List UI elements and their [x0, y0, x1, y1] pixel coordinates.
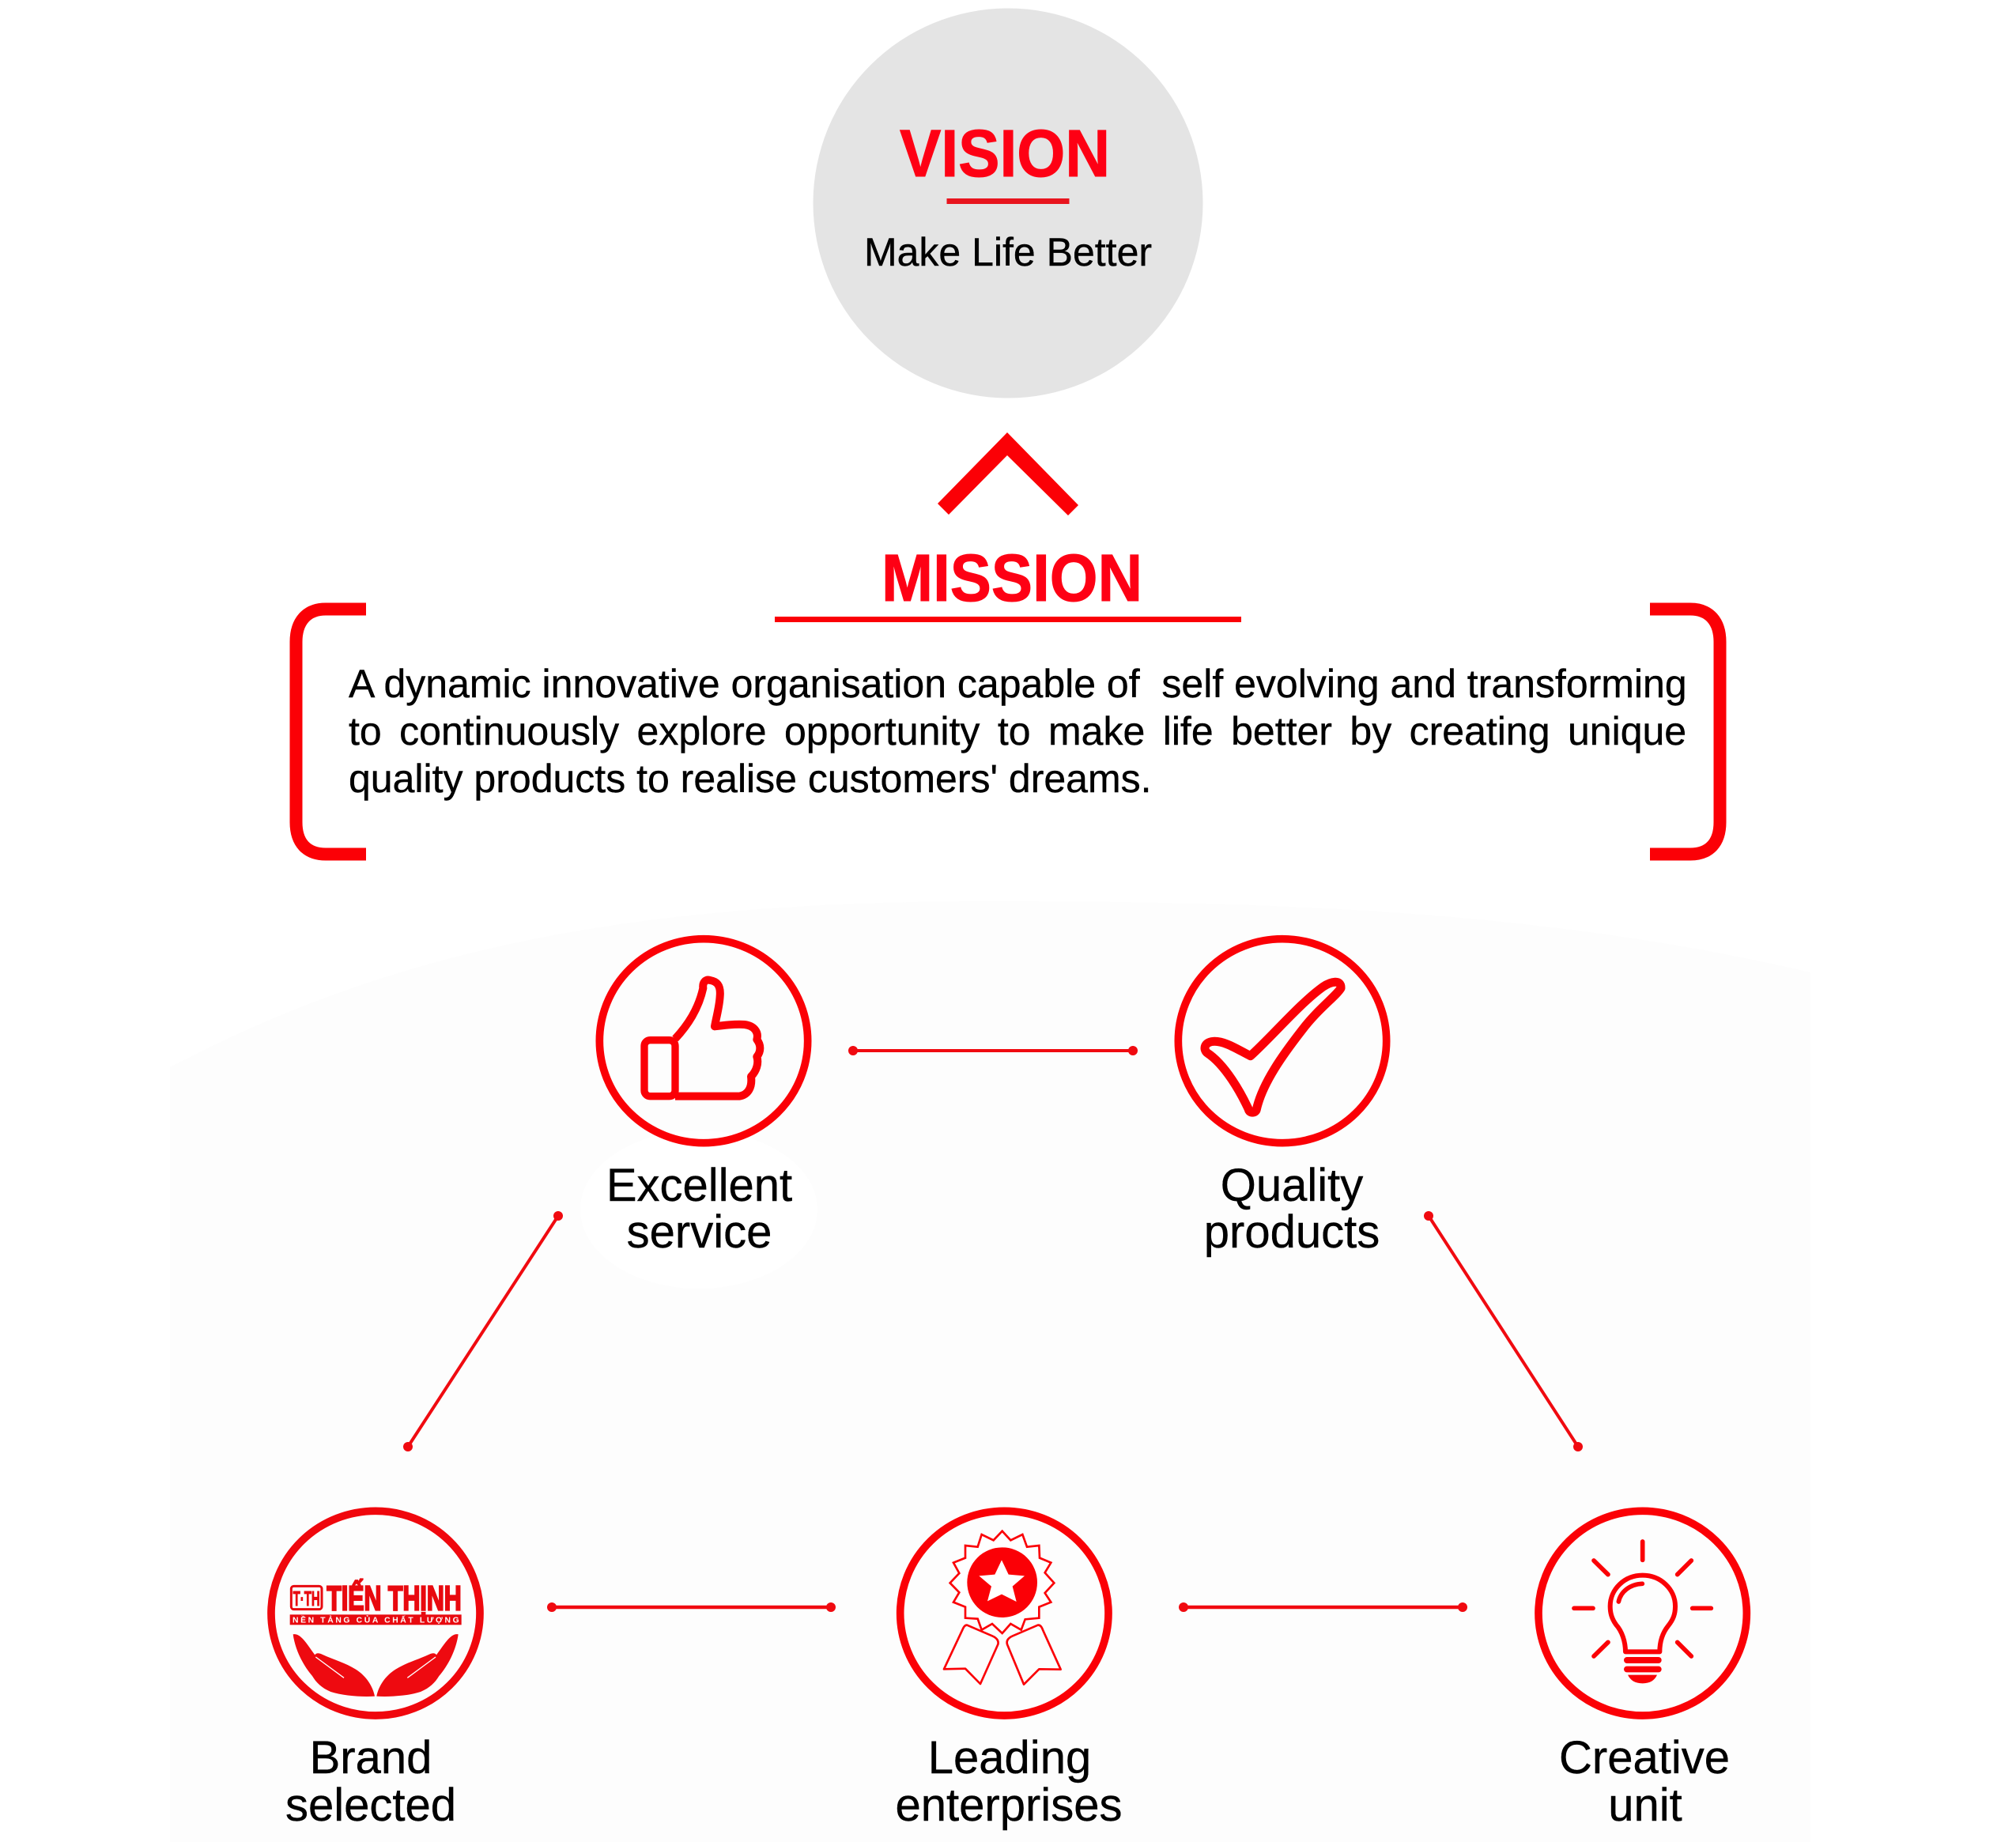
arrow: chevron up to vision: [938, 432, 1078, 515]
label: excellent service: Excellent: [606, 1160, 792, 1211]
connector: excellent service to quality products: [848, 1046, 1138, 1055]
icon: Tien Thinh brand logo: [271, 1511, 480, 1716]
panel: mission: [296, 541, 1720, 854]
icon: check mark: [1178, 939, 1387, 1143]
connector: leading enterprises to creative unit: [1179, 1602, 1467, 1612]
left bracket: [296, 609, 366, 854]
panel: vision: [813, 8, 1203, 398]
vision heading: VISION: [900, 116, 1110, 191]
mission underline: [775, 617, 1241, 622]
label: quality products: Quality: [1221, 1160, 1363, 1211]
mission heading: MISSION: [882, 541, 1142, 615]
vision statement: Make Life Better: [864, 230, 1152, 274]
connector: quality products to creative unit: [1424, 1211, 1583, 1451]
label: brand selected: Brand: [310, 1732, 432, 1783]
label: leading enterprises: Leading: [928, 1732, 1091, 1783]
vision underline: [947, 198, 1069, 204]
mission text: A dynamic innovative organisation capable of self evolving and transforming: [349, 662, 1687, 706]
connector: brand selected to leading enterprises: [547, 1602, 836, 1612]
right bracket: [1650, 609, 1720, 854]
icon: light bulb: [1538, 1511, 1746, 1716]
label: leading enterprises: enterprises: [896, 1780, 1122, 1831]
icon: Tien Thinh brand logo: TIẾN THỊNH: [327, 1580, 462, 1618]
icon: Tien Thinh brand logo: T·TH: [293, 1587, 320, 1610]
label: brand selected: selected: [285, 1780, 456, 1831]
icon: award rosette: [900, 1511, 1108, 1716]
icon: Tien Thinh brand logo: NỀN TẢNG CỦA CHẤT LƯỢNG: [293, 1615, 459, 1625]
vision circle: [813, 8, 1203, 398]
label: quality products: products: [1204, 1206, 1380, 1258]
label: creative unit: unit: [1608, 1780, 1682, 1831]
connector: excellent service to brand selected: [403, 1211, 563, 1451]
mission text: quality products to realise customers' dreams.: [349, 757, 1152, 801]
label: creative unit: Creative: [1559, 1732, 1730, 1783]
mission text: to continuously explore opportunity to make life better by creating unique: [349, 709, 1686, 753]
icon: thumbs up: [599, 939, 808, 1143]
mission text: [349, 662, 1687, 801]
label: excellent service: service: [627, 1206, 772, 1258]
